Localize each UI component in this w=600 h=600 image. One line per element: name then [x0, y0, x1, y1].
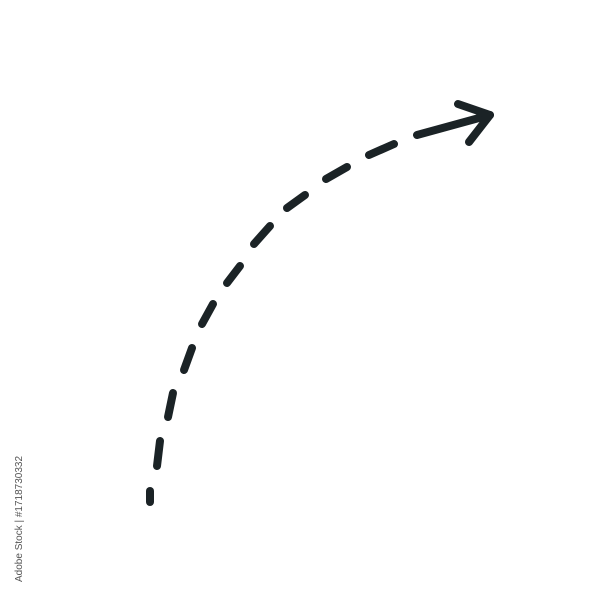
watermark text: Adobe Stock | #1718730332: [14, 456, 25, 582]
